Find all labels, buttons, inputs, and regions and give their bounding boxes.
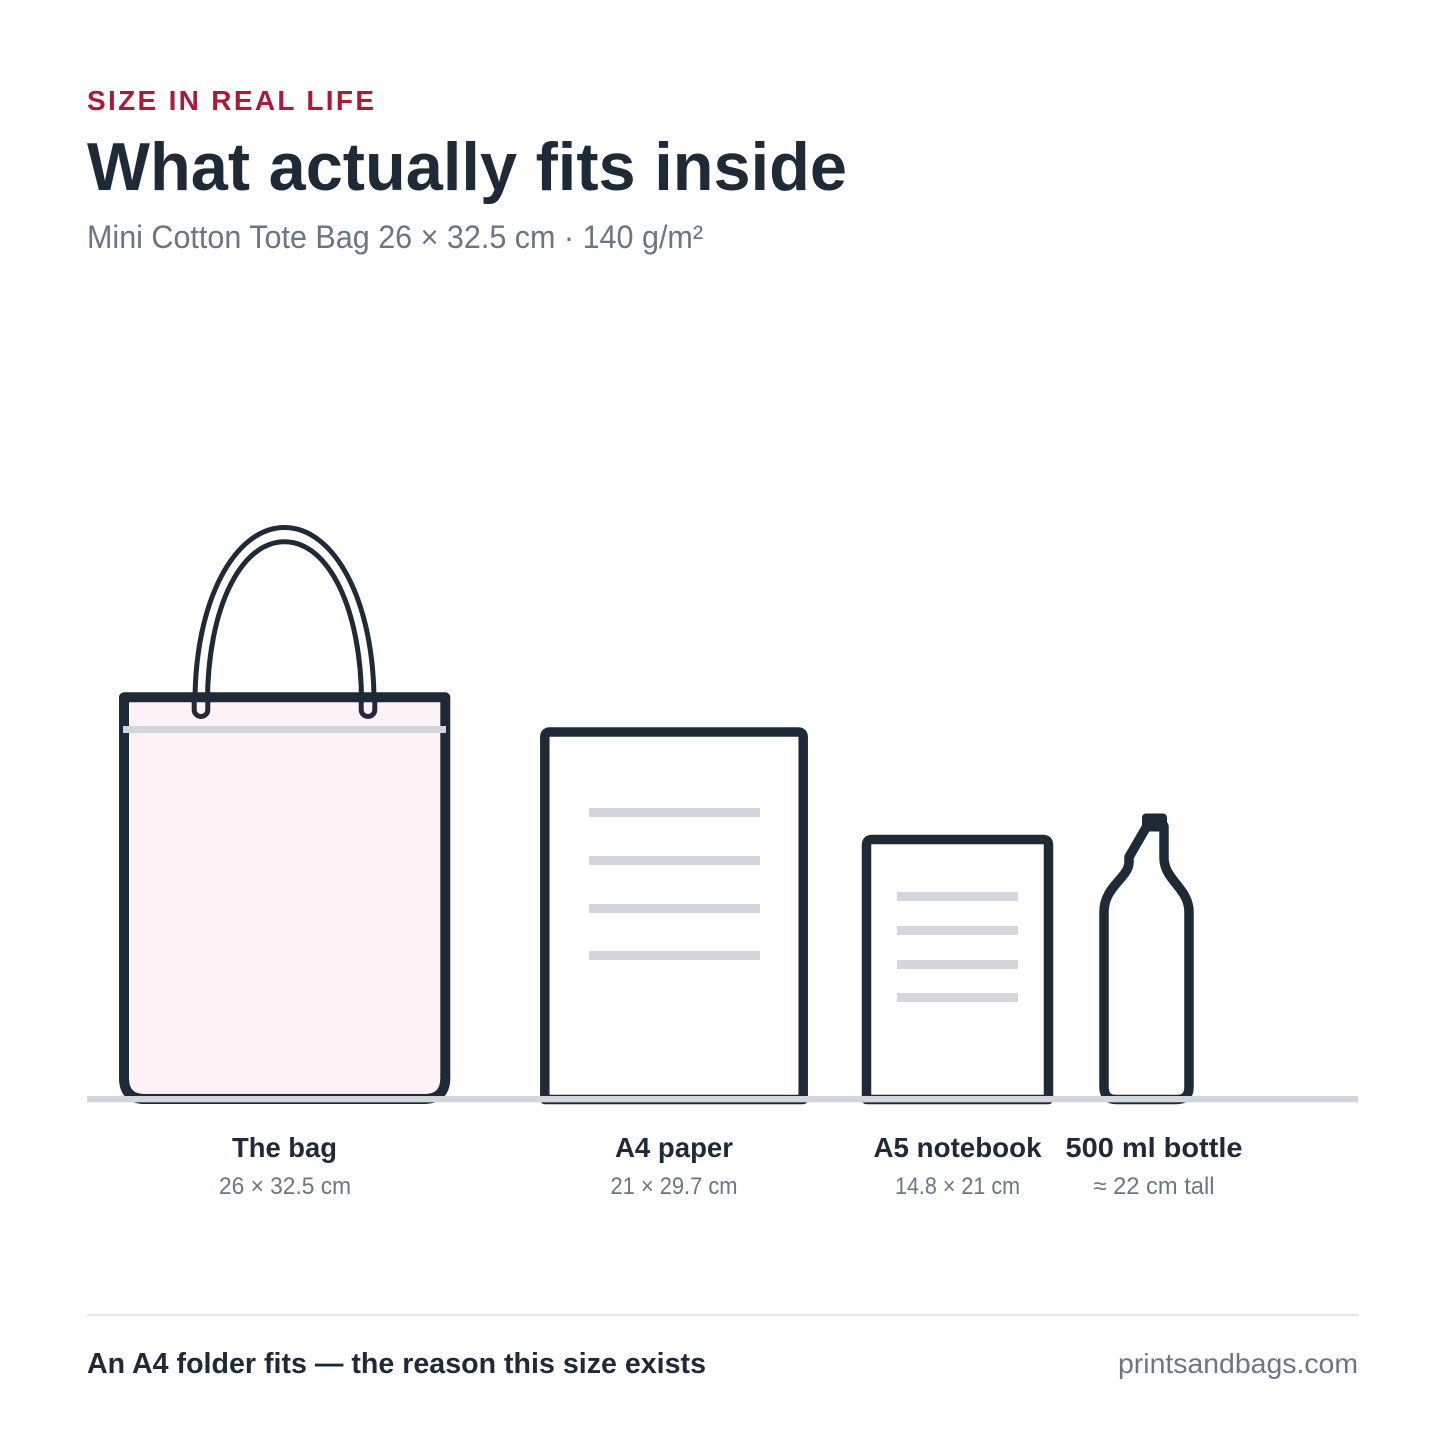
- ground line: [87, 1096, 1358, 1102]
- handle stitched ends: [194, 702, 375, 716]
- bag handle: [195, 528, 374, 702]
- bag hem band: [123, 726, 446, 733]
- footer note: An A4 folder fits — the reason this size exists: [87, 1348, 706, 1380]
- label: A5 notebook: 14.8 × 21 cm: [895, 1173, 1020, 1200]
- label: the bag: 26 × 32.5 cm: [219, 1173, 351, 1200]
- label: the bag: [219, 1132, 351, 1200]
- label: A4 paper: [610, 1132, 738, 1200]
- bottle outline: [1104, 826, 1189, 1100]
- label: A4 paper: 21 × 29.7 cm: [610, 1173, 738, 1200]
- label: A4 paper: A4 paper: [615, 1132, 733, 1163]
- label: 500 ml bottle: [1066, 1132, 1242, 1200]
- label: A5 notebook: [874, 1132, 1042, 1200]
- paper outline: [545, 732, 803, 1100]
- notebook text lines: [897, 892, 1018, 1002]
- label: 500 ml bottle: 500 ml bottle: [1066, 1132, 1242, 1163]
- label: A5 notebook: A5 notebook: [874, 1132, 1042, 1163]
- label: 500 ml bottle: ≈ 22 cm tall: [1094, 1173, 1214, 1200]
- paper text lines: [589, 808, 760, 960]
- label: the bag: The bag: [232, 1132, 337, 1163]
- bottle cap: [1142, 814, 1167, 832]
- subtitle: Mini Cotton Tote Bag 26 × 32.5 cm · 140 g/m²: [87, 219, 703, 255]
- footer website: printsandbags.com: [1118, 1348, 1358, 1379]
- icon: A5 notebook: [866, 840, 1048, 1100]
- eyebrow heading: SIZE IN REAL LIFE: [87, 85, 374, 116]
- bag body: [124, 697, 445, 1099]
- notebook outline: [866, 840, 1048, 1100]
- icon: bottle: [1104, 814, 1189, 1100]
- footer divider: [87, 1314, 1358, 1316]
- title: What actually fits inside: [87, 129, 847, 205]
- icon: A4 paper: [545, 732, 803, 1100]
- icon: tote bag: [123, 528, 446, 1099]
